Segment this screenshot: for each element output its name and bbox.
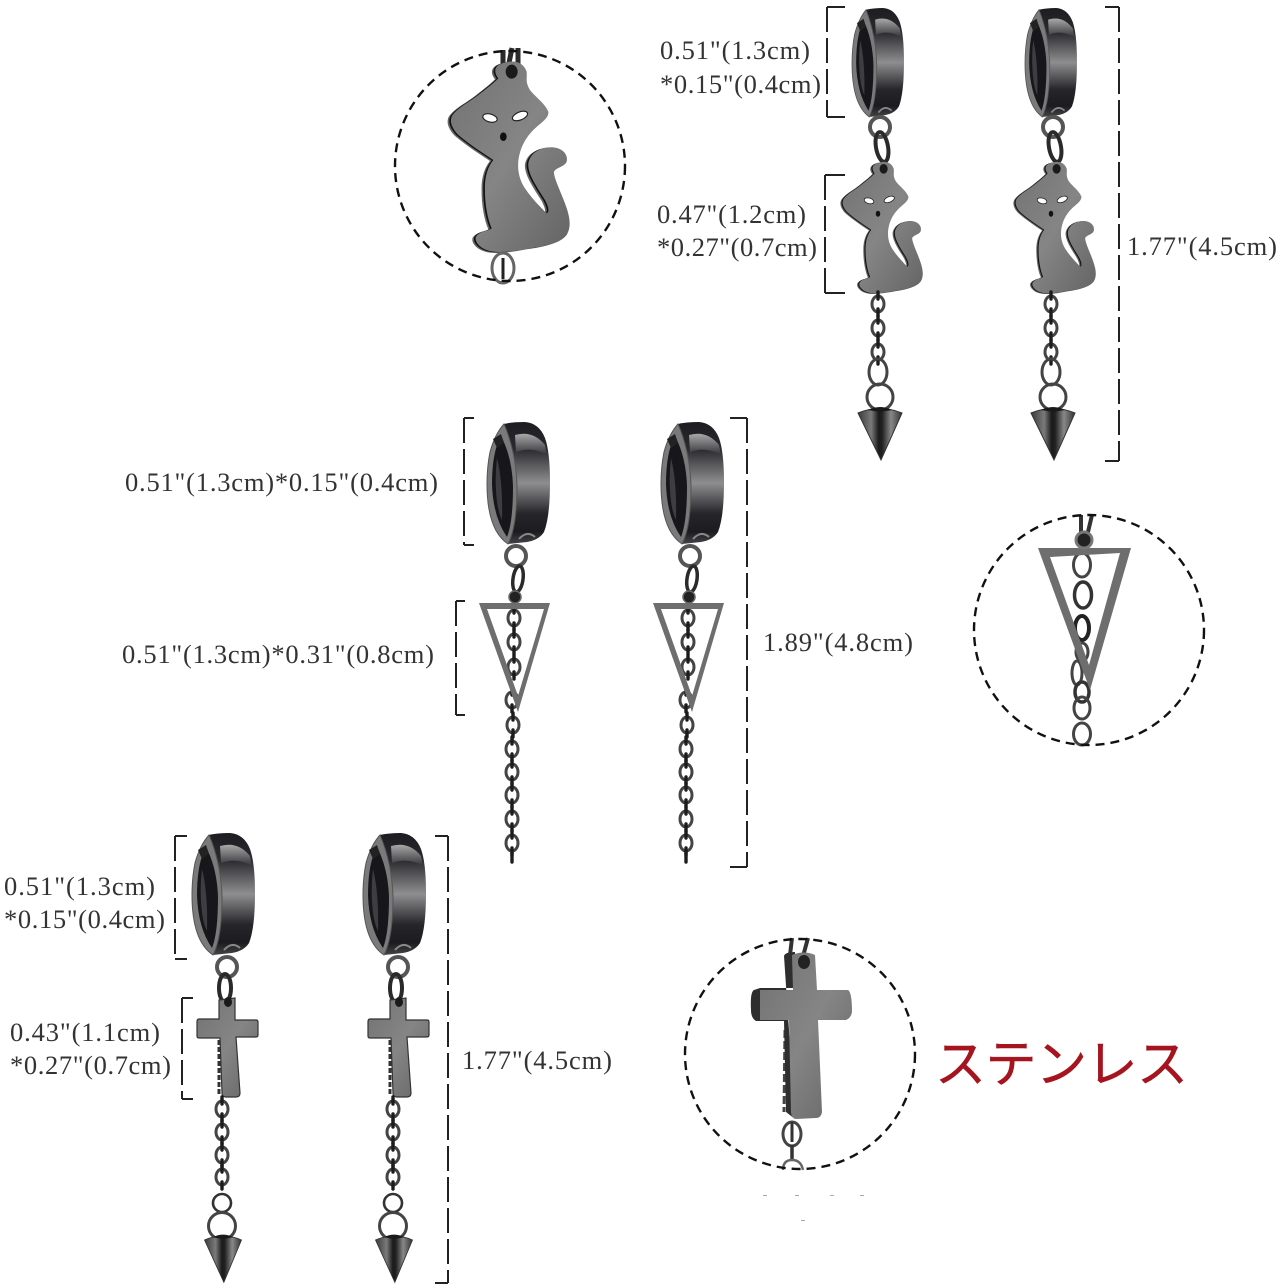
earring: triangle right <box>653 422 724 862</box>
bracket: triangle charm size <box>456 601 465 715</box>
label: cat charm size: 0.47"(1.2cm) <box>657 199 806 229</box>
panel: cat earrings <box>657 7 1277 461</box>
panel: triangle earrings <box>122 418 913 867</box>
callout: cross close-up <box>685 938 915 1170</box>
label: triangle total length: 1.89"(4.8cm) <box>763 627 913 657</box>
earring: cat right <box>1013 8 1096 460</box>
earring: triangle left <box>479 422 550 862</box>
bracket: triangle total length <box>730 418 747 867</box>
label: cross hoop size: 0.51"(1.3cm) <box>4 871 155 901</box>
panel: cross earrings <box>4 833 612 1283</box>
earring: cross left <box>192 833 258 1282</box>
label: triangle hoop size: 0.51"(1.3cm)*0.15"(0.4cm) <box>125 467 438 497</box>
bracket: cross hoop size <box>175 836 187 959</box>
label: cat hoop size: *0.15"(0.4cm) <box>660 69 821 99</box>
label: triangle charm size: 0.51"(1.3cm)*0.31"(0.8cm) <box>122 639 434 669</box>
bracket: cat hoop size <box>827 7 845 117</box>
callout: cat close-up <box>395 48 625 283</box>
callout: triangle close-up <box>974 515 1204 745</box>
label: cross charm size: 0.43"(1.1cm) <box>10 1017 160 1047</box>
label: cat charm size: *0.27"(0.7cm) <box>657 232 817 262</box>
earring: cross right <box>363 833 429 1282</box>
label: cat hoop size: 0.51"(1.3cm) <box>660 35 810 65</box>
label: cat total length: 1.77"(4.5cm) <box>1127 231 1277 261</box>
bracket: cat total length <box>1105 7 1119 461</box>
bracket: triangle hoop size <box>464 418 474 545</box>
earring: cat left <box>840 8 923 460</box>
label: cross hoop size: *0.15"(0.4cm) <box>4 904 165 934</box>
label: cross total length: 1.77"(4.5cm) <box>462 1045 612 1075</box>
bracket: cat charm size <box>825 175 845 293</box>
label: cross charm size: *0.27"(0.7cm) <box>10 1050 171 1080</box>
bracket: cross charm size <box>182 998 193 1099</box>
heading: stainless steel: ステンレス <box>935 1036 1188 1093</box>
bracket: cross total length <box>435 836 448 1283</box>
